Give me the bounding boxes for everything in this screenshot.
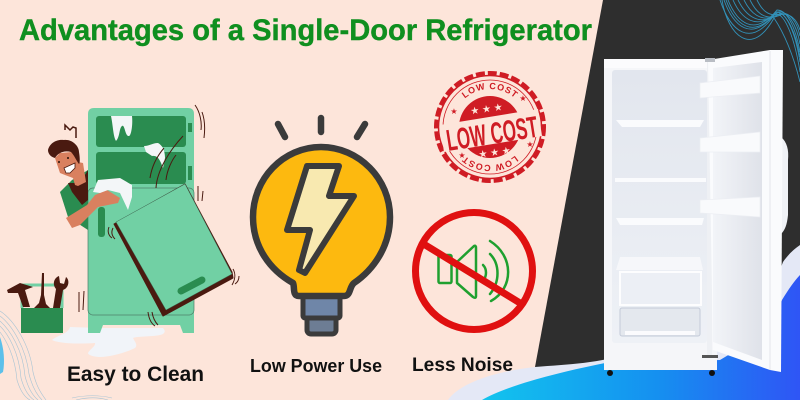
fallen door [114, 184, 233, 316]
puddle on floor [52, 327, 165, 357]
bulb glass [253, 147, 390, 296]
prohibition circle [416, 212, 532, 330]
stamp stars: ★ ★ ★ [470, 102, 503, 118]
bulb base upper [303, 296, 340, 318]
lower compartment outline [88, 188, 194, 315]
motion lines [79, 105, 239, 326]
top right contour wave [720, 0, 800, 82]
stamp curved top text: LOW COST [462, 82, 518, 98]
stamp: low cost: ★ ★ ★ [478, 145, 512, 161]
foam on second shelf [144, 143, 165, 168]
fridge feet [607, 370, 613, 376]
toolbox [21, 308, 63, 333]
hammer [7, 283, 33, 307]
mouth [64, 163, 75, 173]
cabinet interior [612, 70, 707, 343]
man [48, 125, 132, 230]
neck and face [55, 152, 86, 186]
shelves [615, 120, 706, 225]
apron [68, 170, 88, 205]
stamp: low cost [434, 71, 546, 183]
label: low power use: Low Power Use [250, 356, 382, 376]
toolbox handle frame [22, 285, 62, 308]
cloth [93, 178, 132, 210]
stamp main text: LOW COST [444, 111, 540, 158]
door inner panel [713, 62, 762, 360]
title: Advantages of a Single-Door Refrigerator [19, 14, 592, 47]
fridge body [88, 108, 194, 333]
stamp: low cost: ★ [519, 94, 527, 103]
door bins [700, 76, 760, 217]
door handle [181, 280, 202, 291]
stamp: low cost: ★ [458, 151, 466, 160]
bulb base lower [307, 316, 336, 334]
door rear handle [781, 137, 788, 234]
stamp scalloped edge [436, 73, 544, 181]
cabinet body [604, 59, 717, 370]
fridge handle [98, 207, 105, 237]
arm [66, 190, 120, 228]
icon: no noise sign [416, 212, 532, 330]
crisper drawer bottom [620, 308, 700, 336]
surprise mark [65, 125, 76, 138]
stamp inner ring [443, 80, 537, 174]
cabinet side strip [707, 62, 712, 358]
fridge upper shelf panels [96, 116, 186, 147]
bulb rays [278, 118, 365, 137]
label: less noise: Less Noise [412, 355, 513, 376]
door outer [708, 50, 783, 372]
refrigerator photo [604, 50, 788, 376]
screwdriver [34, 273, 50, 308]
cabinet top frame [604, 59, 708, 68]
crisper drawer top [620, 272, 701, 305]
fridge small marks [188, 123, 192, 132]
lightning bolt [287, 166, 354, 273]
crisper lid [616, 257, 703, 270]
illustration: man cleaning green fridge [7, 105, 239, 357]
label: easy to clean: Easy to Clean [67, 363, 204, 386]
bottom wave: pale band [448, 245, 800, 400]
stamp band across disc [440, 109, 542, 152]
speaker cone [457, 246, 476, 298]
foam on top shelf [111, 116, 132, 141]
door edge stripe [769, 51, 771, 370]
bottom wave: blue gradient [482, 275, 800, 400]
dark diagonal panel [530, 0, 800, 400]
stamp centre disc [459, 96, 521, 158]
stamp curved bottom text: LOW COST [462, 156, 518, 172]
shirt [60, 170, 88, 230]
stamp: low cost: ★ [526, 140, 534, 149]
eyes [58, 161, 60, 163]
speaker box [438, 255, 452, 283]
prohibition bar [422, 243, 520, 303]
wrench [53, 276, 68, 308]
icon: light bulb [253, 118, 390, 334]
hinges [705, 58, 715, 62]
bottom left contour wave [0, 311, 112, 400]
sound waves [483, 241, 508, 301]
stamp: low cost: ★ [450, 107, 458, 116]
hair [48, 140, 80, 164]
